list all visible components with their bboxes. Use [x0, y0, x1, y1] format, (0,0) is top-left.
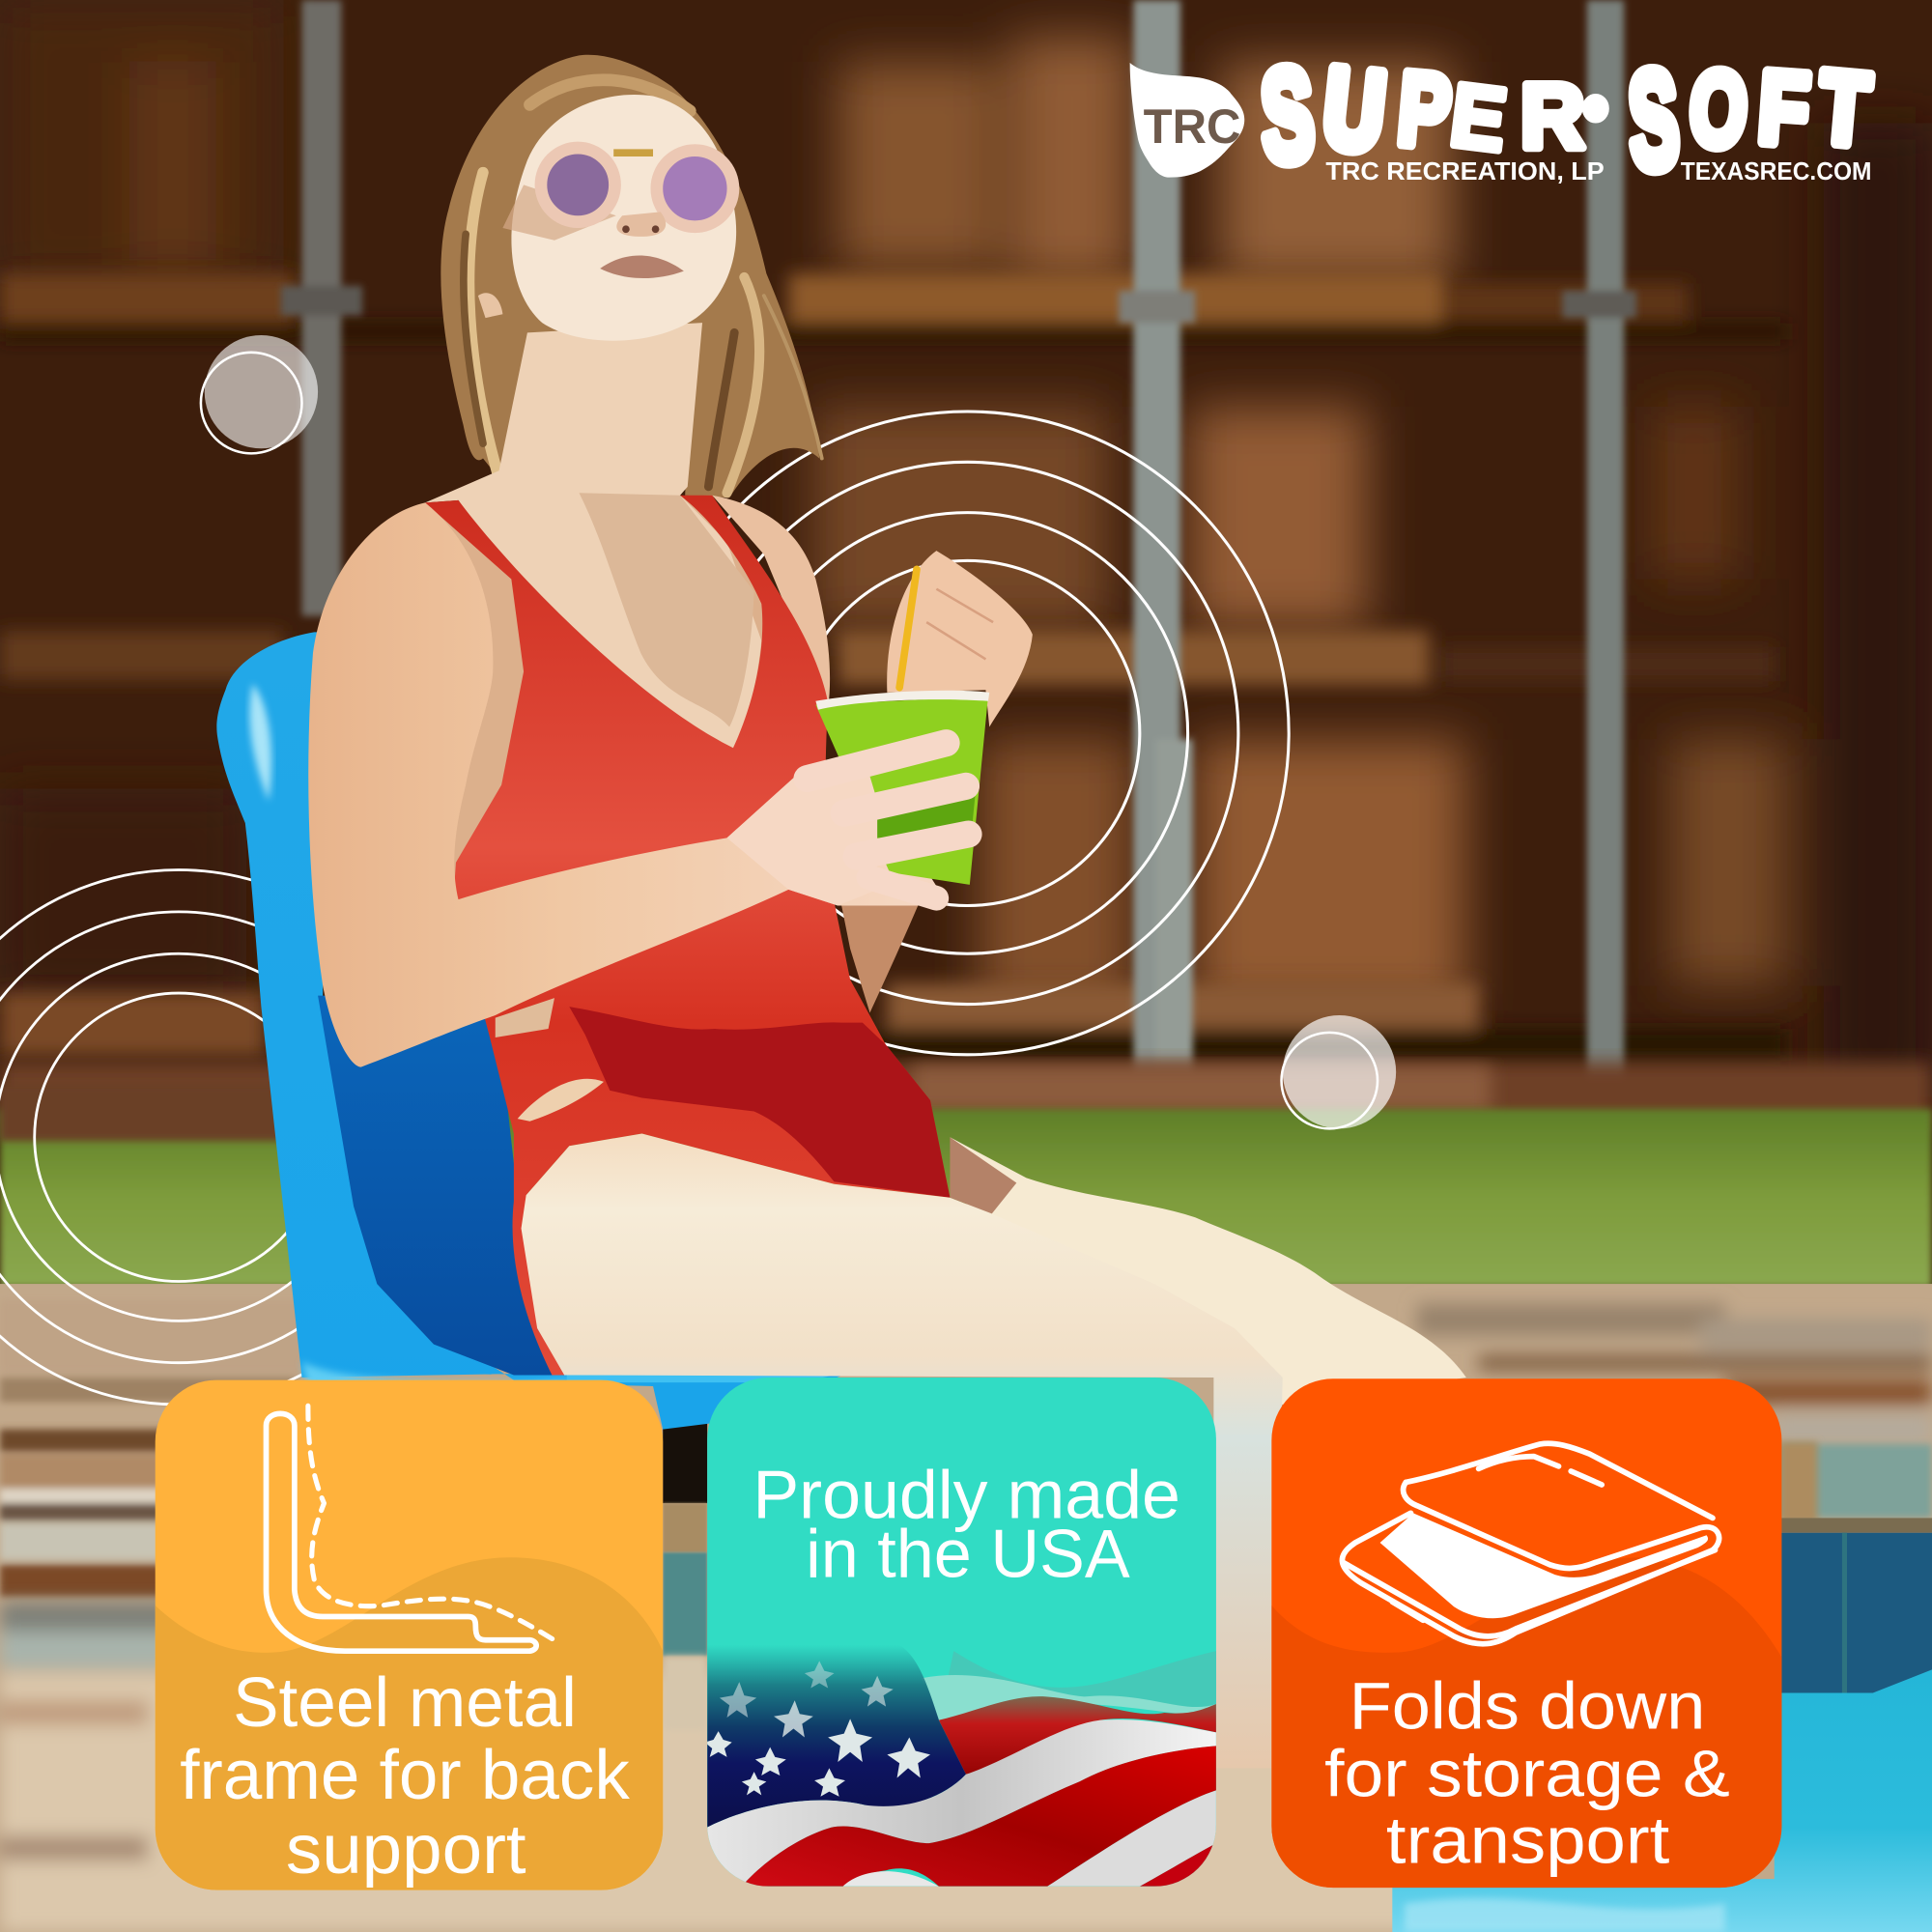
- panel: steel frame: [156, 1380, 663, 1890]
- pool water: [1392, 1669, 1932, 1932]
- fence posts: [281, 0, 1636, 1122]
- torso base skin: [419, 496, 828, 1023]
- panel text: transport: [1386, 1804, 1669, 1878]
- panel wave: [1271, 1557, 1781, 1888]
- icon: seat frame: [267, 1406, 558, 1651]
- logo wordmark: U: [1319, 45, 1390, 175]
- far leg: [950, 1137, 1466, 1405]
- panel wave: [156, 1557, 663, 1890]
- hair back: [440, 55, 819, 497]
- logo wordmark: E: [1445, 66, 1512, 170]
- panel text: support: [286, 1810, 526, 1889]
- holding hand and fingers: [727, 743, 969, 906]
- logo teardrop: TRC: [1144, 99, 1240, 154]
- seat dark back panel: [318, 996, 565, 1375]
- decorative concentric rings right: [645, 412, 1289, 1055]
- pool ledge and tile: [1775, 1444, 1932, 1518]
- face: [511, 95, 736, 341]
- logo wordmark: [1258, 42, 1874, 199]
- waist cutout: [518, 1079, 604, 1122]
- near thigh: [522, 1133, 1283, 1768]
- ground strip: [0, 1062, 1932, 1131]
- american flag: [705, 1645, 1216, 1887]
- waist gap skin: [496, 998, 554, 1037]
- thigh shadow: [950, 1137, 1016, 1213]
- swimsuit shaded lower: [569, 1007, 950, 1198]
- flag stars: [705, 1661, 930, 1797]
- decorative bubble right: [1282, 1015, 1396, 1128]
- logo wordmark: R: [1520, 67, 1584, 168]
- green cup: [815, 696, 988, 885]
- gap stones between panels: [663, 1417, 707, 1503]
- logo wordmark: P: [1394, 50, 1456, 170]
- raised hand: [887, 551, 1033, 727]
- logo wordmark: T: [1815, 50, 1874, 167]
- panel text: in the USA: [806, 1516, 1130, 1592]
- logo subline left: TRC RECREATION, LP: [1325, 158, 1605, 185]
- icon: folded seat: [1342, 1443, 1719, 1644]
- logo wordmark: S: [1258, 42, 1318, 189]
- near shoulder skin right: [712, 496, 830, 708]
- ear: [478, 293, 502, 318]
- neck and chest: [425, 323, 761, 748]
- straw: [899, 569, 917, 688]
- panel text: Proudly made: [753, 1456, 1180, 1532]
- sunglasses: [502, 148, 733, 241]
- lower right arm: [838, 887, 918, 1012]
- swimsuit upper: [425, 496, 950, 1375]
- near arm: [308, 502, 949, 1067]
- nose and lips: [616, 212, 666, 237]
- panel: folds down: [1271, 1378, 1781, 1888]
- logo: TRC Super-Soft: [1130, 42, 1874, 199]
- panel text: [1324, 1669, 1730, 1878]
- logo wordmark: S: [1625, 43, 1683, 199]
- panel text: frame for back: [180, 1736, 630, 1814]
- panel text: [753, 1456, 1180, 1592]
- stone deck: [0, 1284, 1932, 1932]
- decorative concentric rings left: [0, 870, 446, 1405]
- logo teardrop: [1130, 63, 1244, 178]
- panel text: for storage &: [1324, 1737, 1730, 1811]
- panel text: Folds down: [1350, 1669, 1705, 1744]
- grass: [0, 1109, 1932, 1288]
- blue foam seat: [216, 632, 850, 1430]
- logo subline right: TEXASREC.COM: [1681, 158, 1872, 185]
- hair strands: [464, 80, 822, 493]
- logo wordmark: O: [1686, 49, 1751, 170]
- logo wordmark: F: [1755, 50, 1812, 167]
- woman: [308, 55, 1466, 1768]
- chest shadow: [579, 493, 754, 727]
- panel text: Steel metal: [233, 1663, 577, 1742]
- fence rails: [0, 273, 1786, 1061]
- panel: made in the USA: [705, 1378, 1216, 1887]
- decorative bubble left: [201, 335, 318, 453]
- panel text: [180, 1663, 630, 1889]
